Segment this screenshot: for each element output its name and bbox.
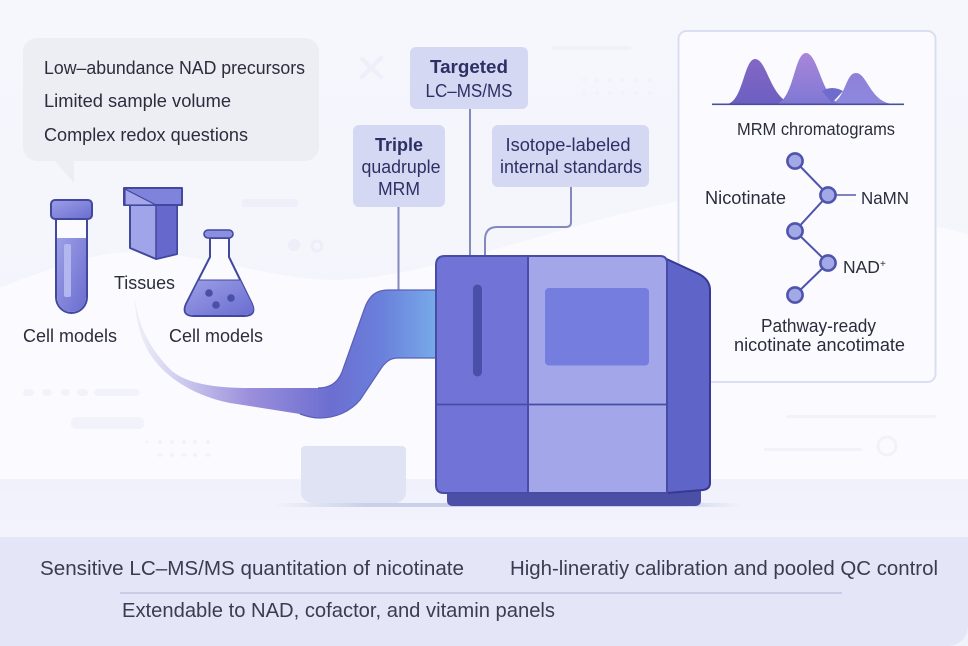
callout: challenges: [23, 38, 319, 183]
instrument: [436, 256, 710, 506]
label: NAD+: NAD: [843, 257, 880, 277]
label: Triple quadrupole MRM: Triple: [375, 135, 423, 155]
label: Targeted LC-MS/MS: [410, 47, 528, 109]
label: pathway-ready caption: Pathway-ready: [761, 316, 876, 336]
callout: challenges: Limited sample volume: [44, 91, 231, 111]
connector: triple quadrupole: [398, 207, 400, 291]
arrow: sample flow into instrument: [135, 290, 438, 418]
decorative background marks: [23, 46, 936, 457]
connector: targeted: [469, 109, 471, 257]
icon: tissue box: [124, 188, 182, 259]
label: Triple quadrupole MRM: [353, 125, 445, 207]
panel: results: [678, 31, 936, 382]
icon: test tube: [51, 200, 92, 313]
callout: challenges: Low–abundance NAD precursors: [44, 58, 305, 78]
label: Targeted LC-MS/MS: LC–MS/MS: [426, 81, 512, 101]
label: NAD+: +: [880, 259, 886, 270]
pedestal block: [301, 446, 406, 503]
label: MRM chromatograms: MRM chromatograms: [737, 119, 895, 139]
instrument window: [545, 288, 649, 366]
label: pathway-ready caption: [734, 316, 905, 355]
label: Isotope-labeled internal standards: internal standards: [500, 157, 642, 177]
footer text 1: Sensitive LC–MS/MS quantitation of nicotinate: [40, 557, 464, 580]
label: cell models right: Cell models: [169, 326, 263, 346]
instrument base: [447, 490, 701, 506]
footer band: [0, 537, 968, 646]
footer text 3: Extendable to NAD, cofactor, and vitamin panels: [122, 599, 555, 622]
flow outline: [300, 290, 438, 418]
callout: challenges: Complex redox questions: [44, 125, 248, 145]
instrument front left: [436, 256, 528, 493]
label: Triple quadrupole MRM: MRM: [378, 179, 420, 199]
connector: isotope standards: [485, 187, 571, 257]
label: Triple quadrupole MRM: quadruple: [362, 157, 440, 177]
pathway diagram: [787, 153, 856, 303]
icon: flask: [185, 230, 253, 316]
chart: MRM chromatograms: [712, 53, 904, 105]
label: Isotope-labeled internal standards: [492, 125, 649, 187]
instrument side: [660, 256, 710, 493]
instrument slot: [473, 284, 482, 376]
label: cell models left: Cell models: [23, 326, 117, 346]
footer text 2: High-lineratiy calibration and pooled QC control: [510, 557, 938, 580]
instrument front right: [528, 256, 667, 493]
label: Nicotinate: Nicotinate: [705, 188, 786, 208]
panel seam: [436, 404, 667, 406]
label: pathway-ready caption: nicotinate ancotimate: [734, 335, 905, 355]
label: Targeted LC-MS/MS: Targeted: [430, 57, 508, 77]
label: Tissues: Tissues: [114, 273, 175, 293]
label: Isotope-labeled internal standards: Isotope-labeled: [506, 135, 630, 155]
label: NaMN: NaMN: [861, 188, 909, 208]
floor shadow line: [275, 503, 740, 507]
